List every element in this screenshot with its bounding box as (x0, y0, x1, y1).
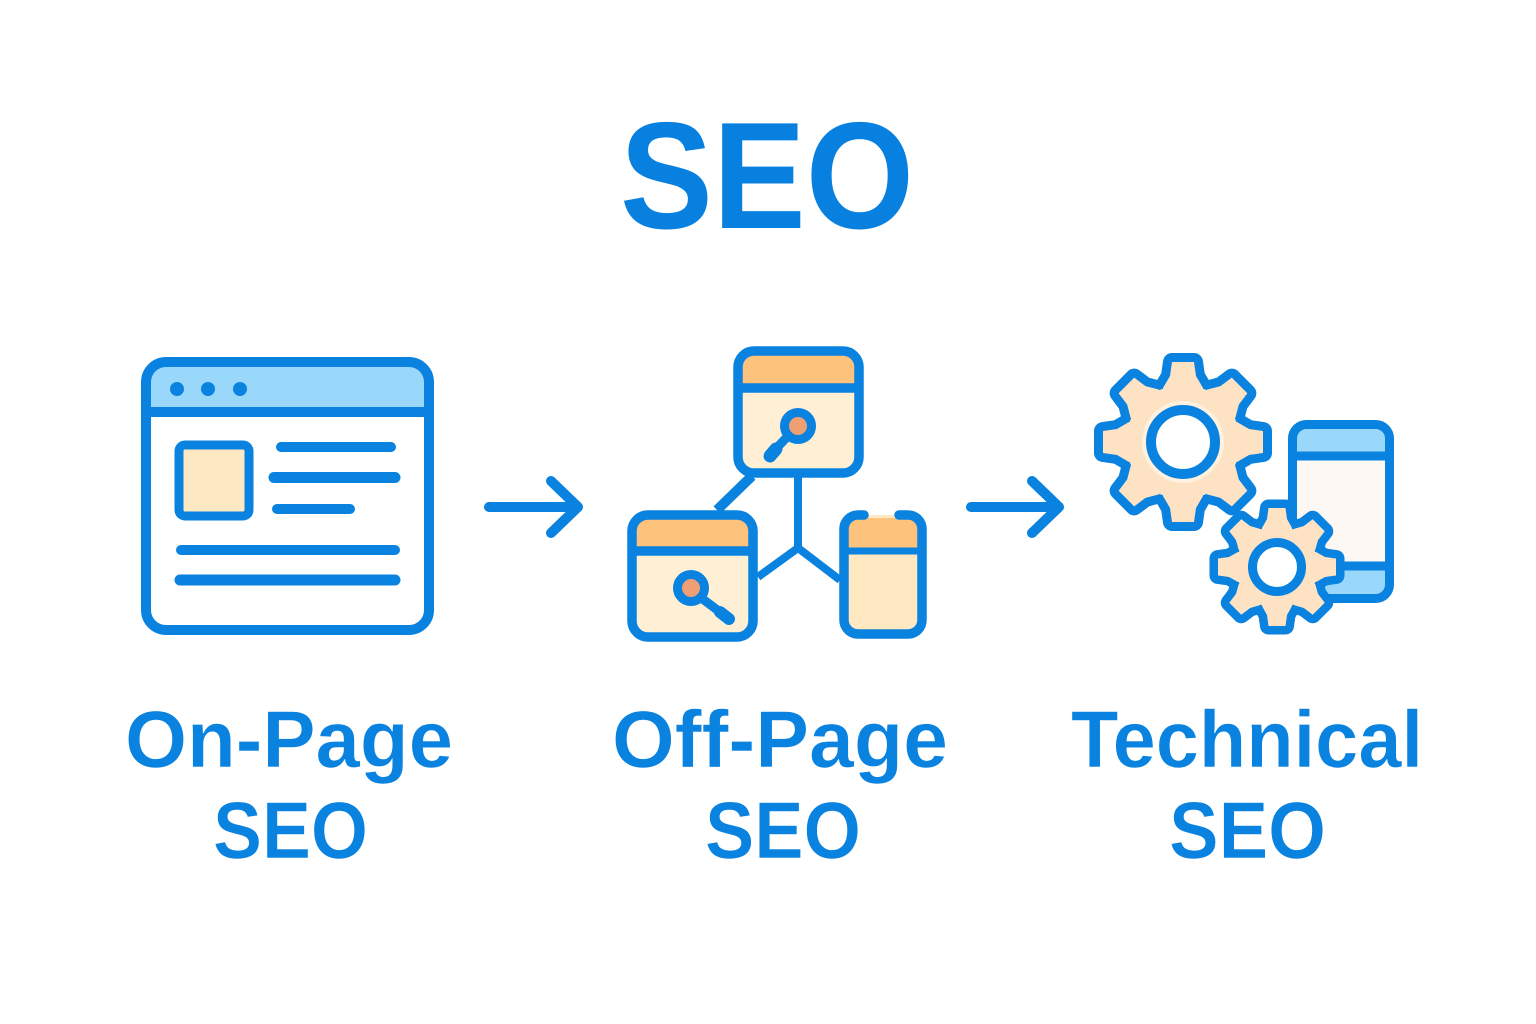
label: Technical SEO (1071, 695, 1423, 876)
title: SEO (620, 91, 914, 261)
arrow: on-page to off-page (489, 481, 578, 533)
arrow: off-page to technical (971, 481, 1059, 533)
left page card (632, 515, 753, 637)
label: Off-Page SEO: SEO (705, 786, 861, 876)
icon: browser window (146, 362, 429, 630)
icon: gears and phone (1103, 362, 1390, 626)
label: On-Page SEO: On-Page (125, 695, 453, 785)
phone (1292, 424, 1390, 598)
label: On-Page SEO (125, 695, 453, 876)
top page card (738, 351, 859, 473)
label: Off-Page SEO: Off-Page (612, 695, 948, 785)
large gear (1103, 362, 1263, 522)
label: Technical SEO: Technical (1071, 695, 1423, 785)
label: Off-Page SEO (612, 695, 948, 876)
connectors (717, 476, 840, 580)
label: On-Page SEO: SEO (213, 786, 368, 876)
right page card (844, 515, 922, 634)
icon: linked pages network (632, 351, 922, 637)
label: Technical SEO: SEO (1169, 786, 1326, 876)
small gear (1218, 508, 1336, 626)
